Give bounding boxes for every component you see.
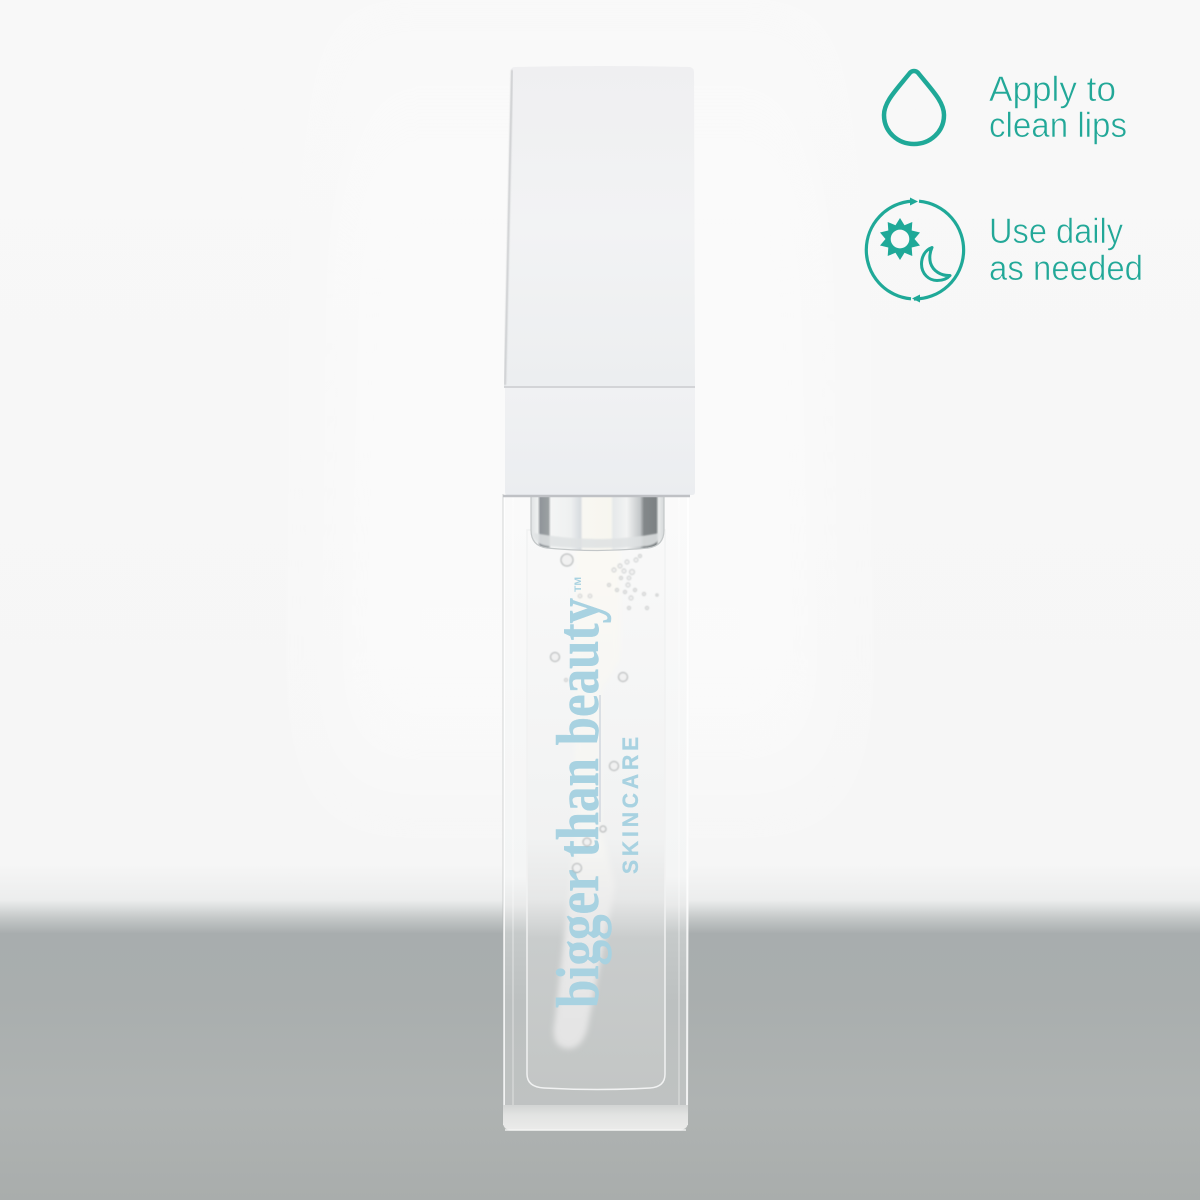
skincare logotype: SKINCARE [618,733,643,874]
text: use daily as needed: Use daily [989,212,1123,251]
icon: water drop [884,71,944,144]
text: use daily as needed: as needed [989,249,1143,288]
clear tube body [503,494,690,1131]
icon: day and night cycle [866,198,964,302]
product: lip gloss tube [503,66,695,1131]
trademark: TM [573,577,583,592]
text: apply to clean lips: Apply to [989,70,1116,109]
brand logotype: bigger than beauty [545,598,611,1008]
air bubbles [550,554,658,872]
text: apply to clean lips: clean lips [989,106,1127,145]
inner chamber [527,530,665,1090]
usage instruction: apply to clean lips [884,70,1127,145]
text: apply to clean lips [989,70,1127,145]
cap edge shading [505,70,512,385]
metal collar neck [531,495,664,550]
cap lower collar [505,388,695,495]
tube base [503,1105,688,1130]
usage instruction: use daily as needed [866,198,1143,302]
cap upper [504,66,695,386]
text: use daily as needed [989,212,1143,288]
applicator wand [554,548,620,1049]
wand stem highlight [599,695,601,822]
